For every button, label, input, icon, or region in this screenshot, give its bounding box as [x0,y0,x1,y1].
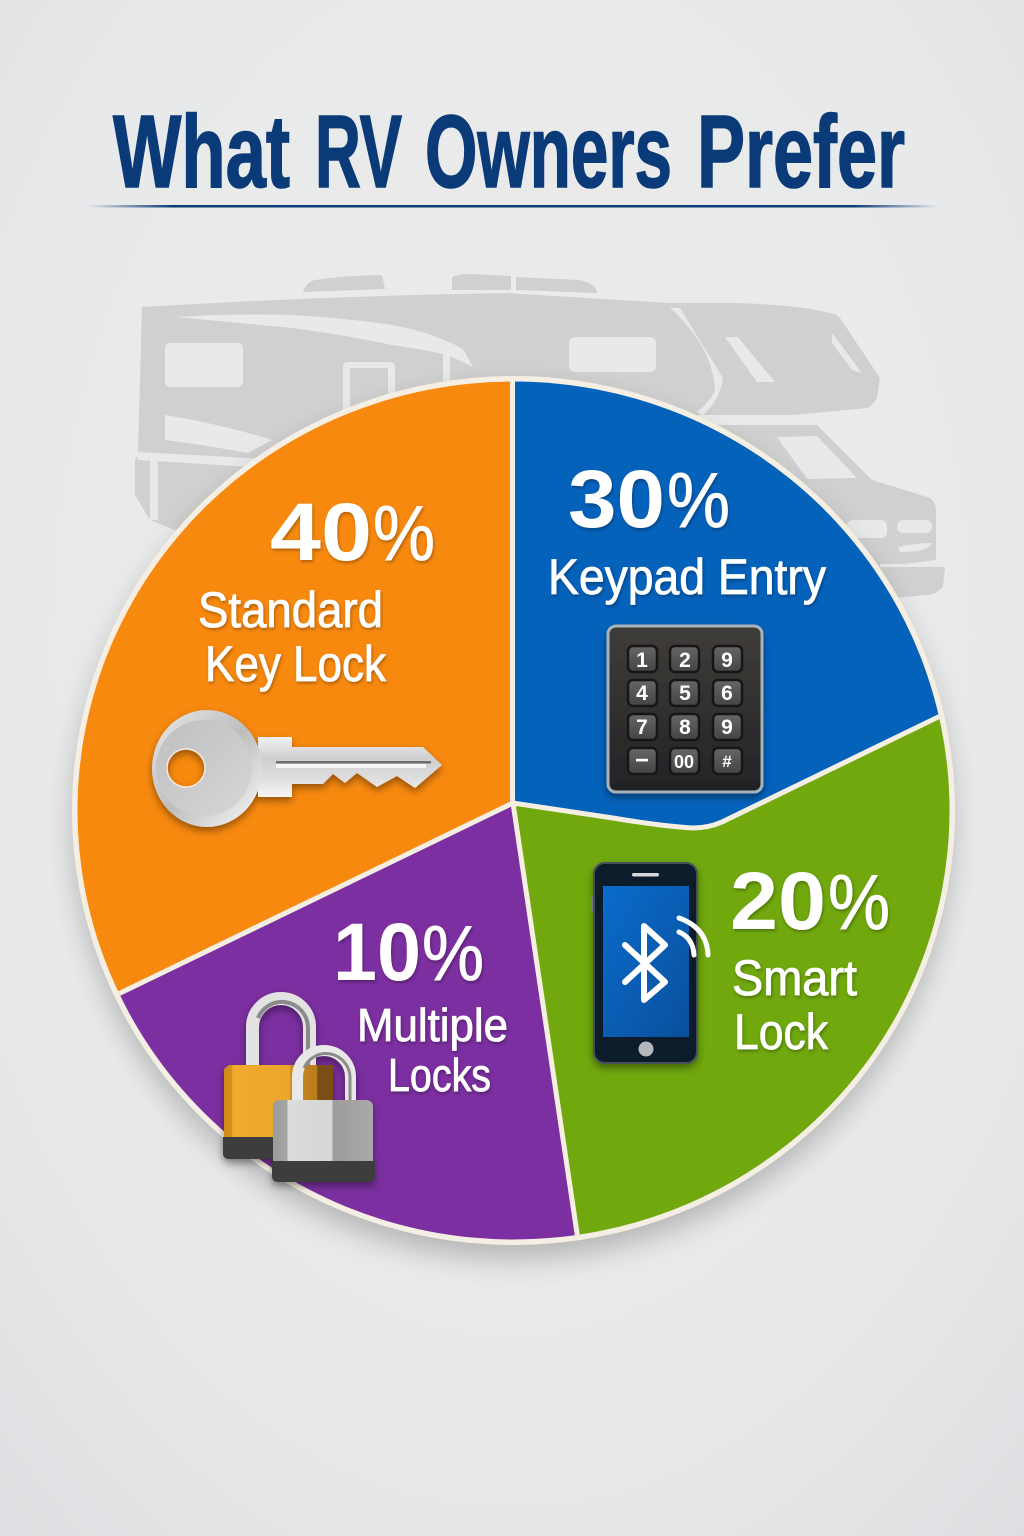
label: 20% Smart Lock: 20 [730,856,826,947]
icon: keypad: 9 [721,716,733,739]
icon: keypad: 2 [679,649,691,672]
label: 20% Smart Lock: Lock [734,1004,829,1060]
label: 40% Standard Key Lock: Key Lock [205,636,387,692]
icon: keypad: # [722,752,732,771]
label: 30% Keypad Entry: 30 [568,454,665,545]
pie shadow [73,391,953,1259]
label: 40% Standard Key Lock: % [373,489,435,577]
label: 40% Standard Key Lock [198,487,435,692]
label: 20% Smart Lock: % [828,858,890,946]
title underline [88,205,938,208]
icon: keypad: 4 [636,682,648,705]
icon: keypad: 7 [636,716,648,739]
icon: padlocks [223,998,375,1182]
title: What [113,94,290,209]
label: 20% Smart Lock: Smart [732,950,857,1006]
title: Owners [425,94,672,209]
segment: multiple locks 10% [119,806,578,1240]
icon: keypad: 8 [679,716,691,739]
segment: standard key lock 40% [78,382,510,994]
background RV silhouette [135,274,945,600]
pie chart [50,360,965,1260]
icon: smartphone with bluetooth [591,863,708,1063]
label: 10% Multiple Locks: Locks [388,1049,491,1101]
label: 10% Multiple Locks: % [422,909,484,997]
icon: keypad [608,626,762,792]
icon: keypad: 00 [674,752,694,772]
icon: key [152,710,442,827]
icon: keypad: 6 [721,682,733,705]
icon: keypad: 1 [636,649,648,672]
segment separators [118,382,940,1236]
label: 40% Standard Key Lock: 40 [270,487,372,578]
icon: keypad: − [635,747,649,774]
label: 10% Multiple Locks: 10 [333,907,421,998]
label: 40% Standard Key Lock: Standard [198,582,383,638]
icon: keypad: 5 [679,682,691,705]
label: 10% Multiple Locks [333,907,508,1101]
segment: smart lock 20% [516,717,950,1235]
title: RV [315,94,402,209]
label: 20% Smart Lock [730,856,890,1060]
title [113,94,905,209]
pie rim [72,376,955,1245]
label: 30% Keypad Entry: Keypad Entry [548,549,826,605]
label: 30% Keypad Entry: % [667,456,730,544]
icon: keypad: 9 [721,649,733,672]
label: 30% Keypad Entry [548,454,826,605]
segment: keypad entry 30% [515,382,939,826]
label: 10% Multiple Locks: Multiple [357,999,508,1051]
title: Prefer [697,94,905,209]
